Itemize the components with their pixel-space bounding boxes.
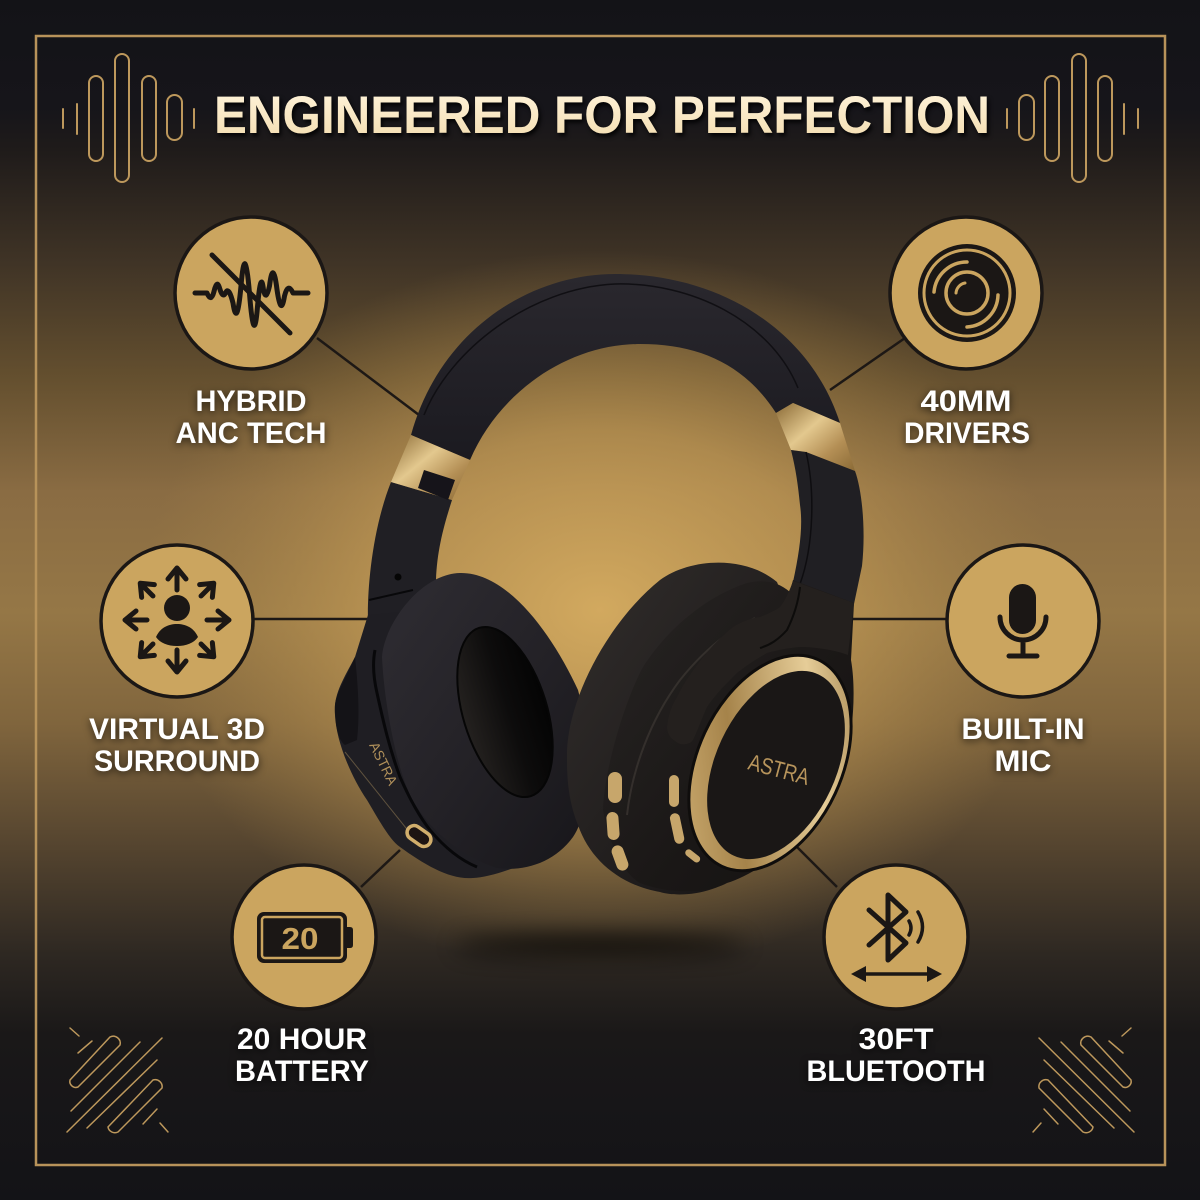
label: DRIVERS xyxy=(904,417,1030,450)
waveform decoration left xyxy=(63,54,194,182)
feature: built-in mic xyxy=(947,545,1099,778)
left ear cup shell xyxy=(335,612,570,878)
right cushion xyxy=(567,563,800,894)
label: ANC TECH xyxy=(176,417,326,450)
icon: microphone xyxy=(947,545,1099,697)
corner ornament bottom right xyxy=(1033,1028,1134,1133)
left gold hinge xyxy=(391,435,470,500)
label: HYBRID xyxy=(196,385,306,418)
shadow beneath headphones xyxy=(455,936,745,954)
label: 20 HOUR xyxy=(237,1023,367,1056)
label: 40MM xyxy=(920,385,1012,418)
label: 30FT xyxy=(858,1023,934,1056)
waveform decoration right xyxy=(1007,54,1138,182)
astra mark right: ASTRA xyxy=(746,749,813,790)
left cushion xyxy=(382,573,588,869)
astra mark left: ASTRA xyxy=(366,739,401,788)
left arm xyxy=(368,482,452,622)
feature: virtual 3D surround xyxy=(89,545,265,778)
icon: noise cancel xyxy=(175,217,327,369)
headband pad xyxy=(411,274,840,460)
icon: driver xyxy=(890,217,1042,369)
usb port xyxy=(404,823,434,849)
gold ring xyxy=(657,629,883,897)
yoke and raised hook xyxy=(667,581,854,744)
label xyxy=(806,1023,986,1088)
icon: bluetooth range xyxy=(824,865,968,1009)
label: MIC xyxy=(994,745,1052,778)
leader lines xyxy=(254,338,946,887)
label: BATTERY xyxy=(235,1055,369,1088)
feature: 20 hour battery xyxy=(232,865,376,1088)
label xyxy=(176,385,326,450)
headphones xyxy=(335,274,883,897)
feature: hybrid ANC xyxy=(175,217,327,450)
icon: battery: 20 xyxy=(282,921,318,956)
label xyxy=(235,1023,369,1088)
label: VIRTUAL 3D xyxy=(89,713,265,746)
label: BUILT-IN xyxy=(962,713,1084,746)
side buttons xyxy=(606,772,702,872)
black disc xyxy=(679,649,873,881)
right ear cup shell xyxy=(603,580,883,897)
label xyxy=(89,713,265,778)
corner ornament bottom left xyxy=(67,1028,168,1133)
label xyxy=(962,713,1084,778)
label: SURROUND xyxy=(94,745,260,778)
feature: 30ft bluetooth xyxy=(806,865,986,1088)
title: ENGINEERED FOR PERFECTION xyxy=(214,86,990,145)
label: BLUETOOTH xyxy=(806,1055,986,1088)
icon: battery xyxy=(232,865,376,1009)
right arm xyxy=(791,450,864,604)
ear hole xyxy=(439,616,571,808)
icon: surround xyxy=(101,545,253,697)
feature: 40mm drivers xyxy=(890,217,1042,450)
label xyxy=(904,385,1030,450)
right gold hinge xyxy=(776,403,855,471)
